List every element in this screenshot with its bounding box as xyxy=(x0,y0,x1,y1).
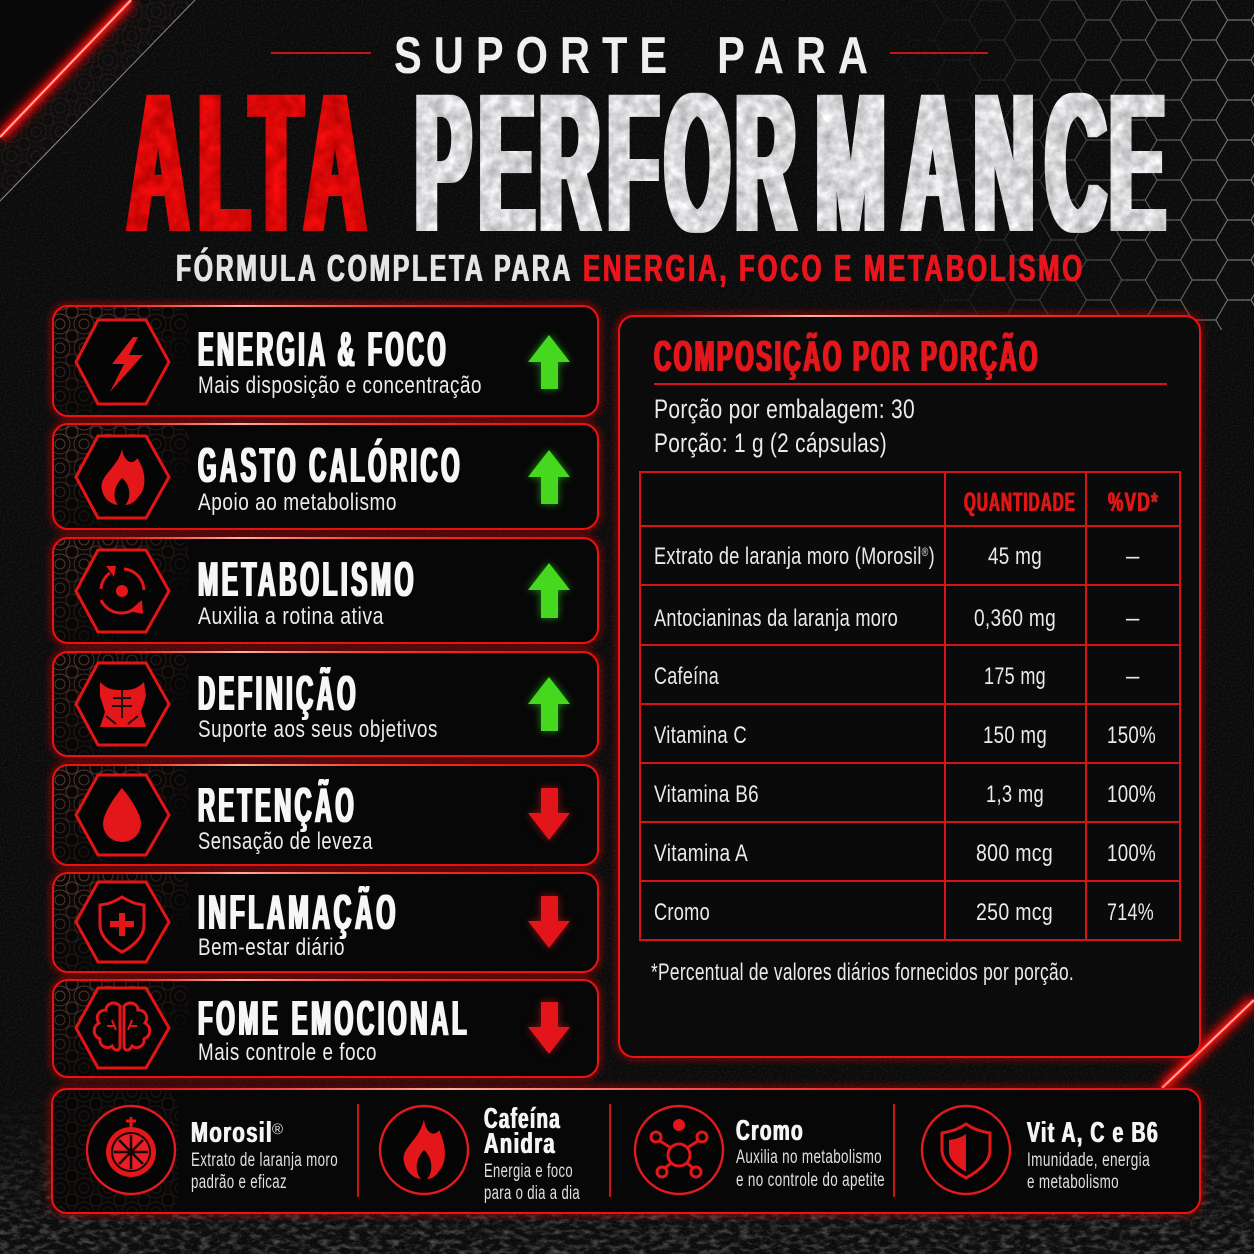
text: Vit A, C e B6 xyxy=(1027,1117,1159,1149)
icon: shield with cross xyxy=(76,882,169,962)
text xyxy=(484,1103,580,1204)
text: e no controle do apetite xyxy=(736,1170,885,1191)
row: fome emocional: FOME EMOCIONAL xyxy=(198,992,470,1046)
row: morosil: – xyxy=(1126,543,1140,570)
panel: composition xyxy=(619,315,1200,1057)
row: metabolismo xyxy=(53,537,598,643)
headline: alta: ALTA xyxy=(128,54,365,274)
text: Extrato de laranja moro xyxy=(191,1150,338,1171)
description: Mais disposição e concentração xyxy=(198,372,482,399)
row: vitamina c: 150 mg xyxy=(983,722,1047,749)
table header: QUANTIDADE xyxy=(964,487,1076,517)
row: vitamina c: 150% xyxy=(1107,722,1156,749)
row: gasto calorico: GASTO CALÓRICO xyxy=(198,438,463,493)
arrow down xyxy=(528,896,570,948)
arrow down xyxy=(528,1002,570,1054)
text: padrão e eficaz xyxy=(191,1172,287,1193)
text: para o dia a dia xyxy=(484,1183,580,1204)
item: vitaminas xyxy=(922,1106,1159,1194)
row: vitamina c xyxy=(654,722,1156,749)
description: Suporte aos seus objetivos xyxy=(198,716,438,743)
icon: flame xyxy=(380,1106,468,1194)
row: morosil: Extrato de laranja moro (Morosil xyxy=(654,543,1008,570)
subtitle: FÓRMULA COMPLETA PARA xyxy=(176,246,573,290)
text: Anidra xyxy=(484,1128,556,1160)
item: morosil xyxy=(87,1106,338,1194)
title xyxy=(128,27,1165,290)
row: antocianinas: – xyxy=(1126,605,1140,632)
row: cromo xyxy=(654,899,1154,926)
row: fome emocional xyxy=(53,979,598,1077)
row: vitamina c: Vitamina C xyxy=(654,722,747,749)
icon: flame xyxy=(76,436,169,518)
icon: molecule xyxy=(635,1106,723,1194)
row: cromo: Cromo xyxy=(654,899,710,926)
row: vitamina a: 800 mcg xyxy=(976,840,1053,867)
text xyxy=(1027,1117,1159,1193)
row: vitamina a xyxy=(654,840,1156,867)
text: Morosil xyxy=(191,1117,273,1149)
row: morosil: ® xyxy=(922,545,929,559)
text: Energia e foco xyxy=(484,1161,573,1182)
row: antocianinas: Antocianinas da laranja moro xyxy=(654,605,898,632)
row: cromo: 250 mcg xyxy=(976,899,1053,926)
arrow down xyxy=(528,788,570,840)
row: definicao xyxy=(53,651,598,756)
decorative slash: bottom right xyxy=(1162,1000,1254,1088)
icon: brain xyxy=(76,988,169,1068)
row: cafeina: 175 mg xyxy=(984,663,1046,690)
icon: lightning bolt xyxy=(76,320,169,404)
text: Cafeína xyxy=(484,1103,561,1135)
item: cromo xyxy=(635,1106,885,1194)
arrow up xyxy=(528,677,570,731)
row: cafeina: Cafeína xyxy=(654,663,719,690)
row: vitamina b6 xyxy=(654,781,1156,808)
text: Imunidade, energia xyxy=(1027,1150,1150,1171)
text xyxy=(736,1115,885,1191)
decorative slash: top left xyxy=(0,0,195,201)
serving info: Porção por embalagem: 30 xyxy=(654,394,915,424)
panel: ingredients xyxy=(52,1088,1200,1213)
row: inflamacao xyxy=(53,872,598,972)
arrow up xyxy=(528,335,570,389)
description: Apoio ao metabolismo xyxy=(198,489,397,516)
arrow up xyxy=(528,563,570,618)
text: e metabolismo xyxy=(1027,1172,1119,1193)
row: energia e foco xyxy=(53,305,598,416)
icon: water drop xyxy=(76,775,169,855)
row: cafeina: – xyxy=(1126,663,1140,690)
description: Sensação de leveza xyxy=(198,828,373,855)
row: gasto calorico xyxy=(53,423,598,529)
icon: torso xyxy=(76,663,169,745)
row: metabolismo: METABOLISMO xyxy=(198,553,417,607)
row: vitamina b6: 100% xyxy=(1107,781,1156,808)
footnote: *Percentual de valores diários fornecidos por porção. xyxy=(651,959,1074,986)
description: Bem-estar diário xyxy=(198,934,345,961)
title line: suporte para: SUPORTE PARA xyxy=(394,27,880,85)
icon: shield xyxy=(922,1106,1010,1194)
row: energia e foco: ENERGIA & FOCO xyxy=(198,323,449,377)
panel: benefit rows xyxy=(53,305,598,1077)
row: retencao xyxy=(53,764,598,865)
text: ® xyxy=(272,1121,283,1138)
row: morosil: ) xyxy=(929,543,935,570)
subtitle xyxy=(176,246,1085,290)
row: cromo: 714% xyxy=(1107,899,1154,926)
text: Auxilia no metabolismo xyxy=(736,1147,882,1168)
arrow up xyxy=(528,450,570,504)
row: antocianinas xyxy=(654,605,1140,632)
table header: %VD* xyxy=(1108,487,1159,517)
text: Cromo xyxy=(736,1115,804,1147)
table xyxy=(640,472,1180,940)
row: definicao: DEFINIÇÃO xyxy=(198,667,359,721)
headline: performance: PERFORMANCE xyxy=(415,54,1165,274)
row: vitamina a: Vitamina A xyxy=(654,840,748,867)
row: morosil: 45 mg xyxy=(988,543,1042,570)
row: vitamina a: 100% xyxy=(1107,840,1156,867)
icon: blood orange xyxy=(87,1106,175,1194)
serving info xyxy=(654,394,915,458)
text xyxy=(191,1117,338,1193)
item: cafeina anidra xyxy=(380,1103,580,1204)
row: vitamina b6: 1,3 mg xyxy=(986,781,1044,808)
description: Mais controle e foco xyxy=(198,1039,377,1066)
row: antocianinas: 0,360 mg xyxy=(974,605,1056,632)
serving info: Porção: 1 g (2 cápsulas) xyxy=(654,428,887,458)
description: Auxilia a rotina ativa xyxy=(198,603,384,630)
row: cafeina xyxy=(654,663,1140,690)
row: retencao: RETENÇÃO xyxy=(198,779,357,833)
heading: INFLAMAÇÃO xyxy=(198,886,399,940)
row: vitamina b6: Vitamina B6 xyxy=(654,781,759,808)
icon: cycle xyxy=(76,550,169,632)
